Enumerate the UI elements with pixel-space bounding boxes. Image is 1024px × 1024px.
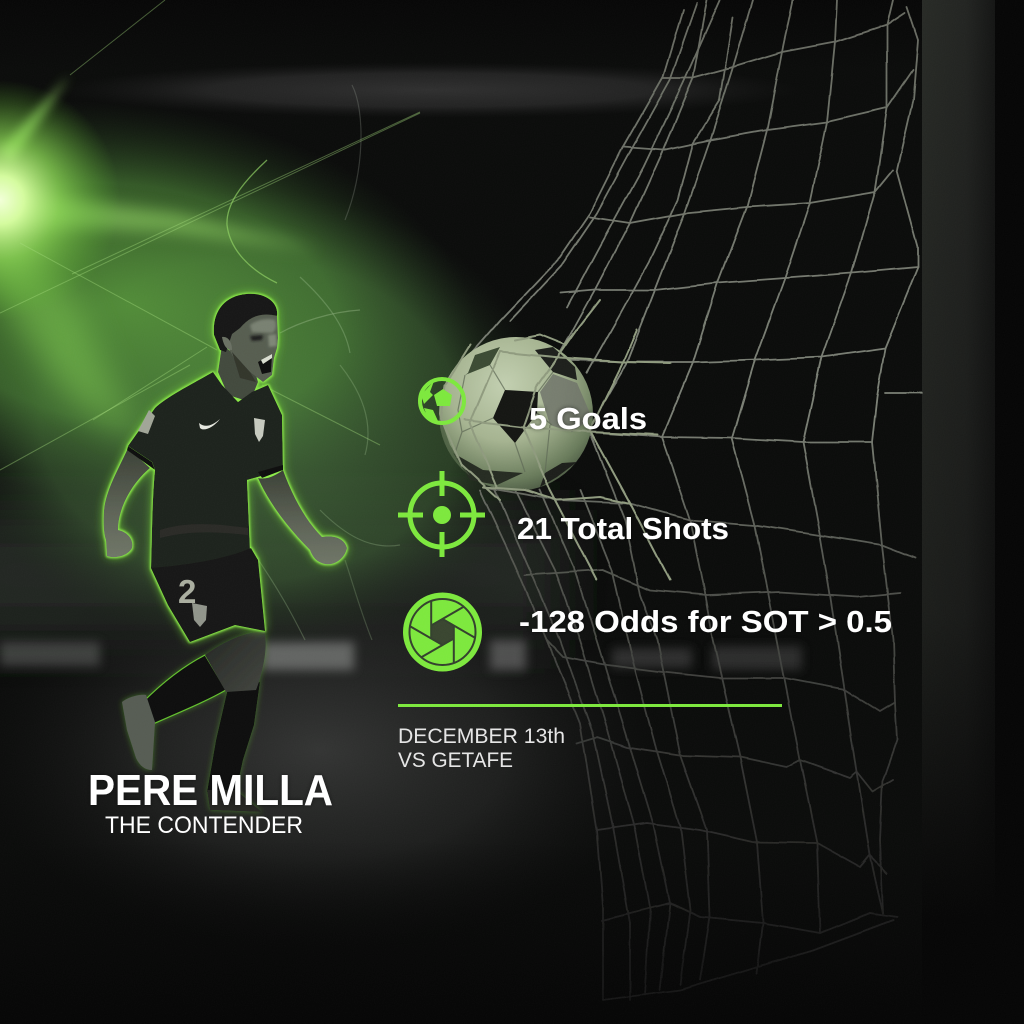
player subtitle: THE CONTENDER: [105, 812, 303, 839]
match info: DECEMBER 13th: [398, 725, 565, 748]
player name: PERE MILLA: [88, 766, 333, 815]
stat: 5 Goals: 5 Goals: [529, 401, 647, 436]
player: Pere Milla: [104, 294, 347, 812]
jersey details: 2: [178, 573, 196, 610]
net strands over ball: [441, 300, 670, 580]
divider line: [398, 704, 782, 707]
match info: [398, 725, 565, 772]
stat: -128 Odds for SOT > 0.5: -128 Odds for SOT > 0.5: [519, 604, 892, 639]
icon: camera aperture: [403, 592, 482, 672]
green light flare: [0, 0, 550, 650]
stat: 21 Total Shots: 21 Total Shots: [517, 511, 729, 546]
soccer ball: [439, 337, 593, 491]
icon: target: [398, 471, 485, 557]
goal post: [922, 0, 1024, 1024]
goal net behind ball: [465, 0, 922, 1000]
legs and boots: [122, 632, 266, 812]
match info: VS GETAFE: [398, 749, 513, 772]
jersey details: [138, 410, 265, 627]
icon: soccer ball: [420, 379, 464, 423]
torso, arms and head: [104, 294, 347, 642]
